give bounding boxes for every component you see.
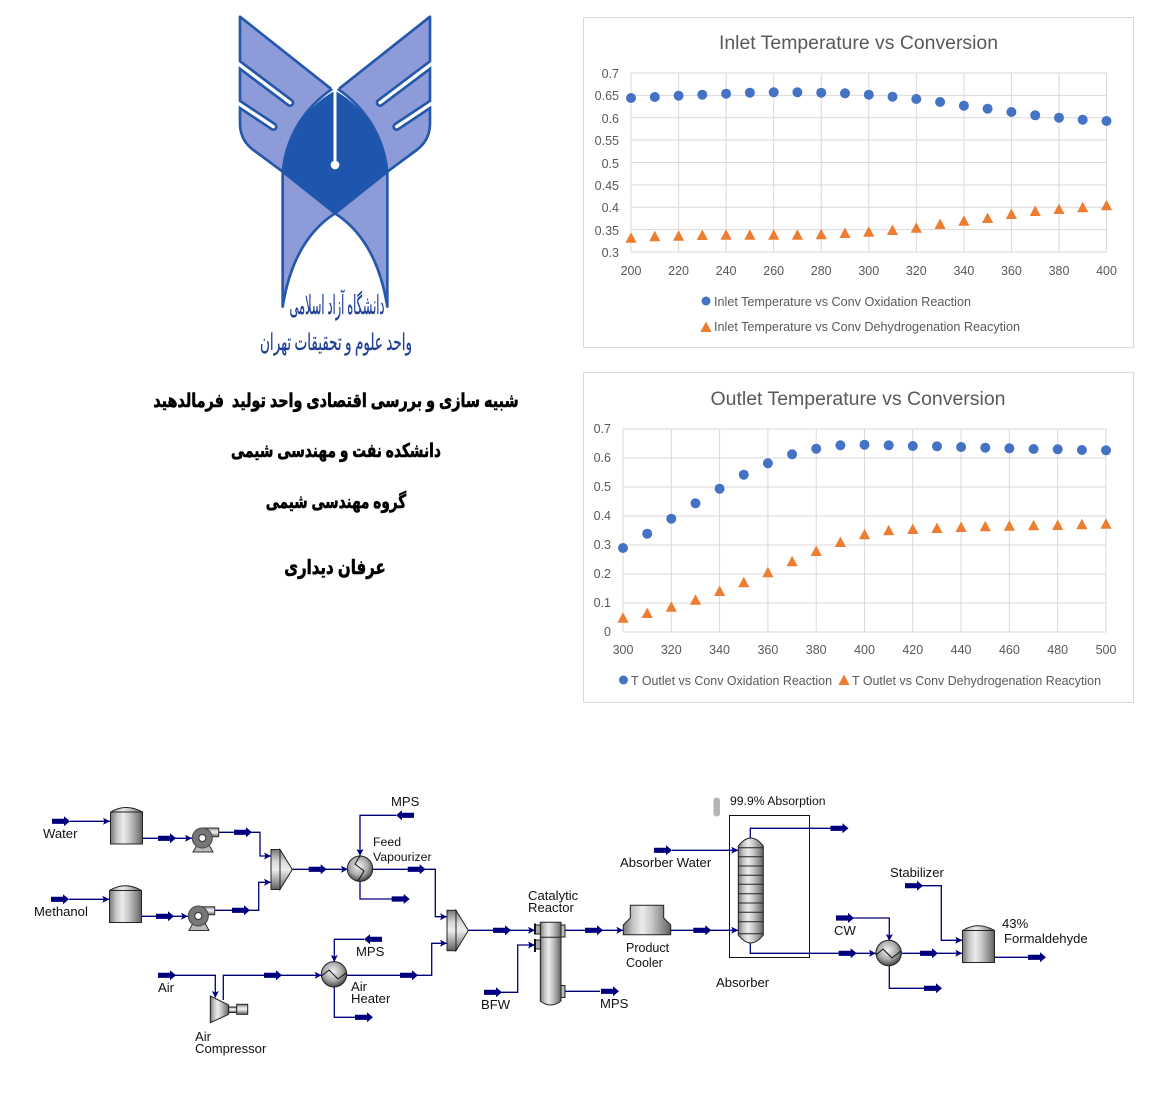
heat exchanger: cooler (876, 940, 901, 966)
unit labels: Catalytic (528, 888, 579, 903)
chart panel: inlet temperature vs conversion (584, 18, 1134, 348)
stream arrows (51, 810, 1046, 1022)
legend: T Outlet vs Conv Dehydrogenation Reacytion (852, 674, 1101, 688)
y axis labels: 0.1 (594, 596, 611, 610)
x axis labels: 500 (1096, 643, 1116, 657)
author name: عرفان دیداری (284, 557, 386, 579)
unit labels: Feed (373, 835, 401, 849)
unit labels: CW (834, 923, 856, 938)
series: dehydrogenation reaction (625, 200, 1112, 243)
y axis labels: 0.5 (602, 157, 619, 171)
x axis labels: 240 (716, 264, 737, 278)
y axis labels: 0.4 (602, 201, 619, 215)
x axis labels: 320 (906, 264, 927, 278)
y axis labels: 0.6 (594, 451, 611, 465)
x axis labels: 320 (661, 643, 682, 657)
y axis labels: 0.6 (602, 112, 619, 126)
unit labels (34, 794, 1088, 1056)
x axis labels: 300 (858, 264, 879, 278)
y axis labels: 0.3 (602, 246, 619, 260)
x axis labels (613, 643, 1116, 657)
compressor: air (210, 996, 248, 1023)
unit labels: Air (195, 1029, 212, 1044)
x axis labels: 400 (1096, 264, 1117, 278)
unit labels: Vapourizer (373, 850, 432, 864)
unit labels: Absorber (716, 975, 770, 990)
logo: Islamic Azad University emblem (233, 17, 437, 307)
mixer: feed (271, 850, 292, 890)
chart title: Outlet Temperature vs Conversion (710, 389, 1006, 410)
tank: formaldehyde (962, 926, 994, 962)
heat exchanger: air heater (321, 962, 347, 987)
gridlines (631, 73, 1106, 252)
unit labels: Stabilizer (890, 865, 944, 880)
stream lines (69, 815, 1029, 1017)
product cooler (623, 905, 671, 935)
pump: methanol (188, 906, 215, 930)
x axis labels: 340 (953, 264, 974, 278)
unit labels: Absorber Water (620, 855, 712, 870)
unit labels: 99.9% Absorption (730, 794, 826, 808)
unit labels: Formaldehyde (1004, 931, 1088, 946)
x axis labels: 480 (1047, 643, 1068, 657)
process flow diagram (34, 794, 1088, 1056)
tank: methanol (110, 886, 142, 922)
x axis labels: 220 (668, 264, 689, 278)
logo caption: university name: دانشگاه آزاد اسلامی (290, 289, 384, 320)
department name: گروه مهندسی شیمی (266, 492, 406, 513)
x axis labels: 280 (811, 264, 832, 278)
legend (619, 674, 1101, 688)
unit labels: Compressor (195, 1041, 267, 1056)
series: dehydrogenation reaction (617, 518, 1112, 623)
y axis labels: 0.7 (594, 422, 611, 436)
y axis labels: 0.4 (594, 509, 611, 523)
unit labels: MPS (356, 944, 385, 959)
x axis labels: 260 (763, 264, 784, 278)
chart panel: outlet temperature vs conversion (584, 372, 1134, 702)
x axis labels: 360 (1001, 264, 1022, 278)
gridlines (623, 429, 1106, 632)
unit labels: 43% (1002, 916, 1029, 931)
unit labels: Air (158, 980, 175, 995)
y axis labels: 0 (604, 625, 611, 639)
x axis labels: 400 (854, 643, 875, 657)
x axis labels: 420 (902, 643, 923, 657)
unit labels: Heater (351, 991, 391, 1006)
tank: water (110, 808, 142, 844)
faculty name: دانشکده نفت و مهندسی شیمی (231, 441, 441, 462)
x axis labels (621, 264, 1117, 278)
y axis labels: 0.55 (595, 134, 619, 148)
y axis labels: 0.65 (595, 89, 619, 103)
heat exchanger: feed vapourizer (347, 856, 373, 881)
unit labels: Methanol (34, 904, 88, 919)
mixer: reactor feed (447, 910, 468, 951)
absorber tag icon (714, 798, 720, 816)
x axis labels: 380 (806, 643, 827, 657)
catalytic reactor (535, 922, 565, 1005)
unit labels: Reactor (528, 900, 574, 915)
legend (700, 295, 1020, 334)
unit labels: Air (351, 979, 368, 994)
y axis labels: 0.7 (602, 67, 619, 81)
unit labels: Cooler (626, 956, 663, 970)
y axis labels: 0.5 (594, 480, 611, 494)
absorber boundary box (730, 816, 810, 958)
x axis labels: 460 (999, 643, 1020, 657)
x axis labels: 200 (621, 264, 641, 278)
legend: T Outlet vs Conv Oxidation Reaction (631, 674, 832, 688)
y axis labels (594, 422, 611, 639)
chart title: Inlet Temperature vs Conversion (719, 33, 998, 54)
series: oxidation reaction (618, 440, 1111, 553)
unit labels: Product (626, 941, 670, 955)
x axis labels: 440 (951, 643, 972, 657)
series: oxidation reaction (626, 87, 1112, 126)
thesis title: شبیه سازی و بررسی اقتصادی واحد تولید فرمالدهید (153, 391, 519, 412)
pump: water (192, 828, 219, 852)
legend: Inlet Temperature vs Conv Dehydrogenation Reacytion (714, 320, 1020, 334)
x axis labels: 300 (613, 643, 633, 657)
unit labels: MPS (391, 794, 420, 809)
unit labels: MPS (600, 996, 629, 1011)
absorber column (738, 838, 763, 943)
x axis labels: 380 (1049, 264, 1069, 278)
unit labels: Water (43, 826, 78, 841)
x axis labels: 340 (709, 643, 730, 657)
unit labels: BFW (481, 997, 511, 1012)
y axis labels (595, 67, 619, 260)
y axis labels: 0.2 (594, 567, 611, 581)
logo caption: university name: واحد علوم و تحقیقات تهران (260, 330, 412, 356)
y axis labels: 0.35 (595, 224, 619, 238)
x axis labels: 360 (757, 643, 778, 657)
legend: Inlet Temperature vs Conv Oxidation Reaction (714, 295, 971, 309)
y axis labels: 0.45 (595, 179, 619, 193)
y axis labels: 0.3 (594, 538, 611, 552)
logo caption: university name (260, 289, 412, 356)
